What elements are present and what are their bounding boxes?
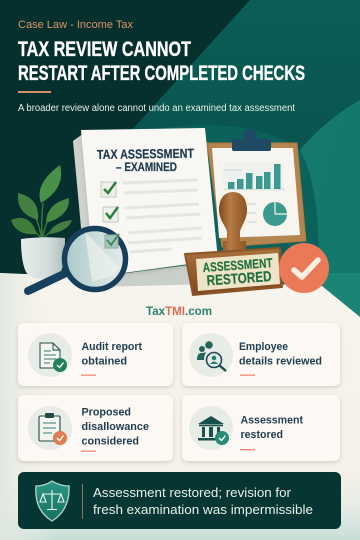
document title: – EXAMINED bbox=[116, 160, 177, 174]
card: proposed disallowance considered bbox=[18, 395, 173, 461]
tabletop surface bbox=[0, 273, 360, 540]
banner text: Assessment restored; revision for bbox=[93, 485, 292, 500]
title: TAX REVIEW CANNOT bbox=[18, 38, 191, 61]
plant stems bbox=[36, 203, 49, 240]
background: dark green header bbox=[0, 0, 360, 300]
stamp label bbox=[196, 253, 280, 291]
subtitle: A broader review alone cannot undo an examined tax assessment bbox=[18, 103, 295, 114]
clipboard board bbox=[207, 143, 306, 247]
chart panel bbox=[223, 162, 284, 189]
document text lines bbox=[106, 180, 202, 254]
card text bbox=[239, 341, 322, 368]
background: arc behind clipboard bbox=[140, 125, 319, 290]
lens refraction: sheet edge bbox=[85, 232, 120, 282]
card text: details reviewed bbox=[239, 356, 322, 368]
card background bbox=[182, 323, 340, 386]
icon: people with magnifier bbox=[189, 333, 233, 377]
card: employee details reviewed bbox=[182, 323, 340, 386]
card accent bbox=[240, 449, 255, 450]
document title: TAX ASSESSMENT bbox=[97, 146, 194, 162]
illustration: magnifier bbox=[28, 228, 126, 291]
checkbox 1 bbox=[101, 182, 116, 197]
card text: considered bbox=[82, 436, 139, 448]
card: audit report obtained bbox=[18, 323, 173, 386]
background: lower teal band bbox=[318, 273, 360, 319]
kicker: Case Law - Income Tax bbox=[18, 19, 134, 31]
illustration: clipboard bbox=[207, 129, 306, 247]
back sheets bbox=[73, 133, 100, 282]
magnifier handle bbox=[28, 273, 66, 291]
card text: Audit report bbox=[82, 341, 142, 353]
card text: Proposed bbox=[82, 406, 131, 418]
banner text bbox=[93, 485, 313, 517]
card background bbox=[18, 323, 173, 386]
chart gridlines bbox=[224, 170, 285, 222]
orange check badge bbox=[279, 243, 329, 293]
card text: obtained bbox=[82, 356, 127, 368]
card background bbox=[18, 395, 173, 461]
banner background bbox=[18, 472, 341, 529]
illustration: stamp and check bbox=[185, 192, 329, 295]
front sheet bbox=[81, 128, 218, 277]
clipboard clip bbox=[232, 129, 271, 151]
card background bbox=[182, 395, 340, 461]
banner text: fresh examination was impermissible bbox=[93, 502, 313, 517]
card text bbox=[240, 414, 303, 441]
plant leaves bbox=[11, 165, 72, 234]
icon: clipboard with check bbox=[28, 406, 72, 450]
card text bbox=[82, 341, 142, 368]
card text: disallowance bbox=[82, 421, 149, 433]
clipboard paper bbox=[212, 148, 300, 238]
card text bbox=[82, 406, 149, 448]
title rule bbox=[18, 91, 51, 93]
banner divider bbox=[82, 484, 83, 519]
conclusion banner bbox=[18, 472, 341, 529]
card text: restored bbox=[240, 429, 283, 441]
card: assessment restored bbox=[182, 395, 340, 461]
magnified checkbox bbox=[105, 234, 119, 248]
title bbox=[18, 38, 305, 85]
card accent bbox=[81, 374, 96, 376]
icon: shield with scales bbox=[36, 481, 69, 521]
illustration: plant bbox=[11, 165, 72, 279]
document title bbox=[97, 146, 194, 174]
card text: Employee bbox=[239, 341, 288, 353]
stamp text bbox=[202, 255, 273, 289]
brand: TaxTMI.com bbox=[146, 304, 212, 318]
background: teal diagonal panel bbox=[130, 0, 360, 320]
tabletop left tint bbox=[0, 273, 56, 540]
background: light teal right panel bbox=[300, 100, 360, 320]
card accent bbox=[81, 450, 96, 452]
magnifier lens bbox=[64, 228, 126, 290]
checkbox 2 bbox=[103, 207, 118, 222]
stamp handle bbox=[219, 192, 247, 251]
stamp text: RESTORED bbox=[206, 269, 272, 289]
card accent bbox=[240, 374, 255, 376]
plant pot bbox=[21, 237, 65, 279]
icon: document with check bbox=[28, 333, 72, 377]
stamp base bbox=[185, 248, 282, 295]
card text: Assessment bbox=[240, 414, 303, 426]
stack base bbox=[88, 262, 214, 287]
stamp text: ASSESSMENT bbox=[202, 255, 273, 275]
illustration: document stack bbox=[73, 128, 218, 287]
bar chart bbox=[228, 164, 280, 189]
pie chart bbox=[263, 202, 287, 226]
icon: institution building with check bbox=[189, 406, 233, 450]
